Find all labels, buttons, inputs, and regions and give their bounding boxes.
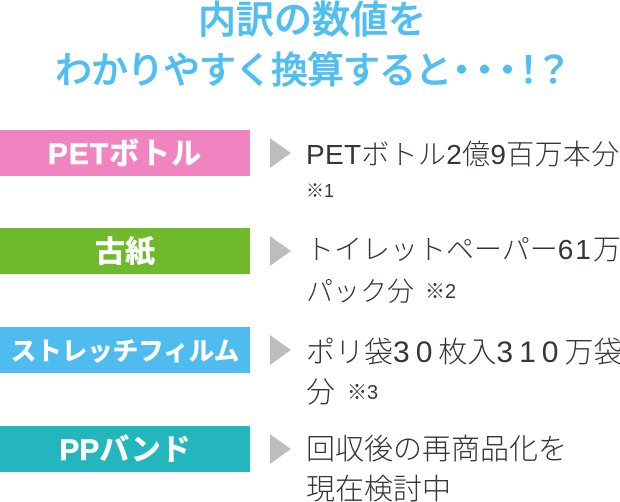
text: waste paper (306, 234, 620, 307)
text: waste paper: パック分 (306, 277, 414, 307)
arrow: PET bottle (270, 138, 291, 168)
title (55, 0, 572, 91)
text: stretch film (306, 336, 620, 409)
title: 内訳の数値を (198, 0, 426, 42)
text: waste paper: トイレットペーパー61万 (306, 234, 620, 265)
bar: PP band (0, 426, 250, 472)
text: waste paper: ※2 (425, 281, 456, 303)
bar: PET bottle: PETボトル (48, 138, 202, 171)
title: ！ (510, 50, 547, 91)
text: stretch film: ポリ袋30枚入310万袋 (306, 336, 620, 369)
text: PET bottle: ※1 (306, 181, 334, 201)
bar: waste paper: 古紙 (95, 236, 155, 269)
text: PET bottle (306, 139, 620, 201)
text: PP band: 回収後の再商品化を (306, 434, 567, 466)
bar: stretch film (0, 327, 250, 373)
bar: stretch film: ストレッチフィルム (11, 338, 239, 366)
title: ・・・ (443, 50, 512, 91)
title: わかりやすく換算すると (55, 50, 451, 91)
text: stretch film: ※3 (347, 382, 378, 404)
bar: PET bottle (0, 130, 250, 176)
arrow: PP band (270, 434, 291, 464)
arrow: waste paper (270, 236, 291, 266)
bar: PP band: PPバンド (59, 434, 191, 467)
arrow: stretch film (270, 335, 291, 365)
text: PET bottle: PETボトル2億9百万本分 (306, 139, 620, 170)
title: ？ (535, 50, 572, 91)
text: PP band (306, 434, 567, 502)
text: stretch film: 分 (306, 377, 335, 409)
bar: waste paper (0, 228, 250, 274)
